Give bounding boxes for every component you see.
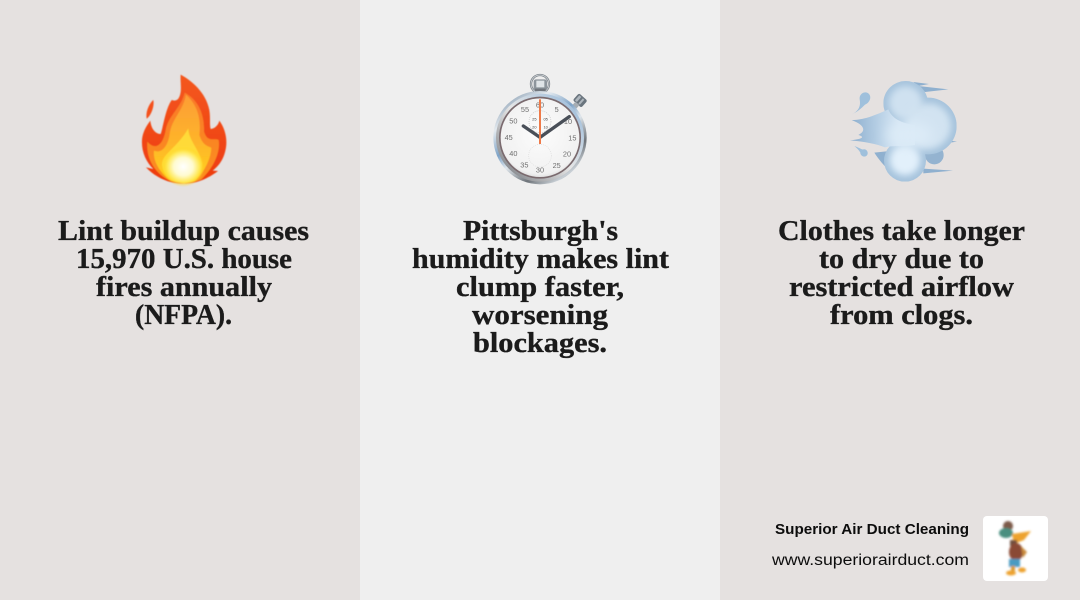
footer: website: www.superiorairduct.com [771,552,969,569]
icon: wind cloud [850,81,957,182]
footer: company name: Superior Air Duct Cleaning [775,522,969,538]
icon: stopwatch: 05 [543,117,549,122]
icon: stopwatch: 55 [521,105,529,114]
icon: stopwatch: 10 [564,117,572,126]
text: humidity line 3: clump faster, [456,271,624,303]
icon: stopwatch: 25 [532,117,537,122]
icon: stopwatch: 30 [536,166,544,175]
text: humidity line 2: humidity makes lint [412,243,669,275]
icon: stopwatch: 50 [509,117,517,126]
text: airflow line 2: to dry due to [819,243,984,275]
fan of wisps blending into the cloud centre [850,109,915,147]
icon: stopwatch: 10 [543,124,549,129]
text: humidity line 4: worsening [472,299,609,331]
logo: duck mascot [983,516,1048,581]
text: airflow line 4: from clogs. [830,299,973,331]
icon: fire [142,75,226,187]
panel: lint fire risk [0,0,360,600]
icon: stopwatch [493,75,587,184]
text: lint fires line 4: (NFPA). [135,299,232,331]
text: airflow line 3: restricted airflow [789,271,1014,303]
icon: stopwatch: 35 [520,161,528,170]
icon: stopwatch: 25 [553,161,561,170]
icon: stopwatch: 40 [509,149,517,158]
heading: lint fires: Lint buildup causes [58,215,309,247]
heading: airflow line 1: Clothes take longer [778,215,1025,247]
heading: humidity line 1: Pittsburgh's [463,215,618,247]
icon: stopwatch: 45 [505,133,513,142]
panel: humidity [360,0,720,600]
icon: stopwatch: 20 [532,124,537,129]
icon: stopwatch: 5 [555,105,559,114]
icon: stopwatch: 20 [563,149,571,158]
text: lint fires line 2: 15,970 U.S. house [76,243,292,275]
icon: stopwatch: 60 [536,100,544,109]
icon: stopwatch: 15 [568,133,576,142]
text: lint fires line 3: fires annually [96,271,273,303]
panel: restricted airflow [779,81,1025,246]
text: humidity line 5: blockages. [473,327,607,359]
